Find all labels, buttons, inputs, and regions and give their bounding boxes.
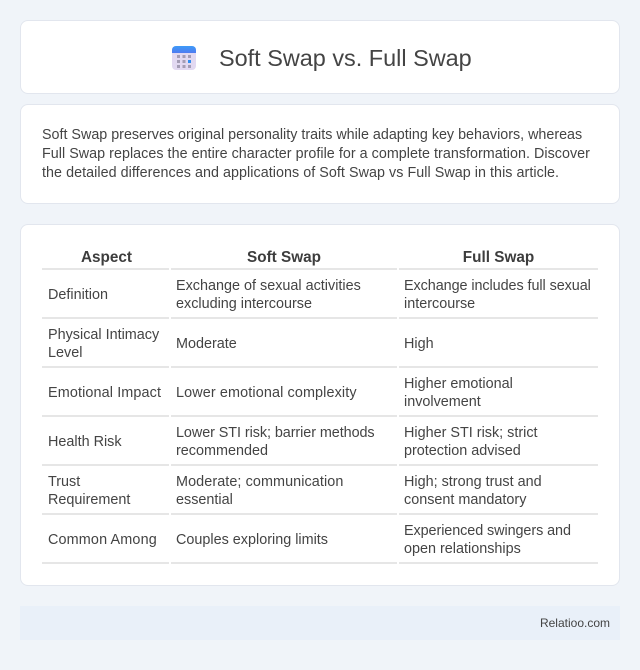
row: Common Among xyxy=(48,523,571,557)
header panel xyxy=(20,20,620,94)
row: Health Risk: Lower STI risk; barrier methods xyxy=(176,425,375,441)
row: Emotional Impact xyxy=(48,376,513,410)
row: Trust Requirement: High; strong trust and xyxy=(404,474,542,490)
row: Definition: intercourse xyxy=(404,296,475,312)
row: Physical Intimacy Level: Physical Intimacy xyxy=(48,327,159,343)
row: Health Risk: Health Risk xyxy=(48,434,122,450)
footer credit: Relatioo.com xyxy=(540,616,610,630)
row: Emotional Impact: involvement xyxy=(404,394,481,410)
row: Physical Intimacy Level xyxy=(48,327,434,361)
table header xyxy=(81,249,534,266)
row: Common Among: Common Among xyxy=(48,532,157,548)
table header: Aspect xyxy=(81,249,132,266)
table header: Full Swap xyxy=(463,249,534,266)
row: Health Risk: recommended xyxy=(176,443,268,459)
intro text xyxy=(42,127,590,181)
row: Physical Intimacy Level: High xyxy=(404,336,434,352)
row: Emotional Impact: Higher emotional xyxy=(404,376,513,392)
row: Common Among: Couples exploring limits xyxy=(176,532,328,548)
row: Definition xyxy=(48,278,591,312)
intro text: Soft Swap preserves original personality traits while adapting key behaviors, whereas xyxy=(42,127,582,143)
intro text: the detailed differences and applications of Soft Swap vs Full Swap in this article. xyxy=(42,165,559,181)
row: Definition: Exchange includes full sexual xyxy=(404,278,591,294)
intro text: Full Swap replaces the entire character profile for a complete transformation. Discover xyxy=(42,146,590,162)
intro panel xyxy=(20,104,620,204)
row: Physical Intimacy Level: Level xyxy=(48,345,82,361)
row: Health Risk xyxy=(48,425,538,459)
icon: calendar xyxy=(172,46,196,70)
row: Common Among: open relationships xyxy=(404,541,521,557)
row: Trust Requirement: Trust xyxy=(48,474,80,490)
row: Trust Requirement: Requirement xyxy=(48,492,130,508)
row: Trust Requirement xyxy=(48,474,542,508)
row: Health Risk: Higher STI risk; strict xyxy=(404,425,538,441)
row: Trust Requirement: consent mandatory xyxy=(404,492,526,508)
row: Physical Intimacy Level: Moderate xyxy=(176,336,237,352)
row: Trust Requirement: Moderate; communication xyxy=(176,474,343,490)
title: Soft Swap vs. Full Swap xyxy=(219,45,472,71)
row: Definition: Definition xyxy=(48,287,108,303)
row: Trust Requirement: essential xyxy=(176,492,233,508)
row: Definition: excluding intercourse xyxy=(176,296,312,312)
row: Emotional Impact: Emotional Impact xyxy=(48,385,161,401)
row: Common Among: Experienced swingers and xyxy=(404,523,571,539)
footer bar xyxy=(20,606,620,640)
comparison table panel xyxy=(20,224,620,586)
table header: Soft Swap xyxy=(247,249,321,266)
row: Definition: Exchange of sexual activities xyxy=(176,278,361,294)
row: Emotional Impact: Lower emotional complexity xyxy=(176,385,357,401)
row: Health Risk: protection advised xyxy=(404,443,521,459)
